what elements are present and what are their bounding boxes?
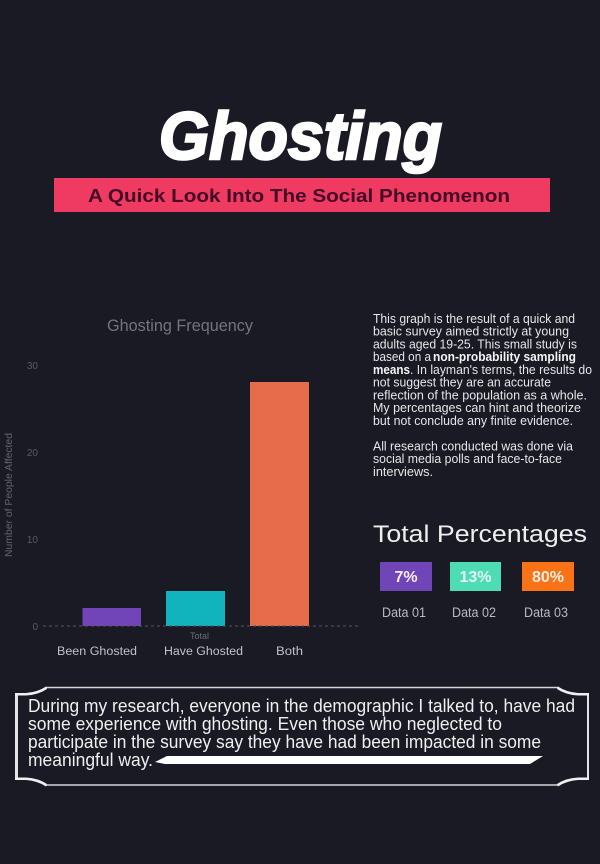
- stat: data 03: [522, 562, 574, 620]
- stat: data 02: [450, 562, 501, 620]
- subtitle banner: [54, 178, 550, 212]
- y axis ticks: 20: [27, 448, 38, 459]
- x axis category labels: Have Ghosted: [164, 646, 243, 658]
- survey description text: means: [373, 362, 410, 377]
- stat: data 01: [380, 562, 432, 620]
- stat: data 01: Data 01: [382, 605, 426, 620]
- bar: have ghosted: [166, 591, 225, 626]
- y axis ticks: [27, 361, 38, 633]
- x axis category labels: Been Ghosted: [57, 646, 137, 658]
- survey description text: [373, 311, 592, 479]
- stat: data 03: Data 03: [524, 605, 568, 620]
- survey description text: This graph is the result of a quick and: [373, 311, 575, 326]
- survey description text: not suggest they are an accurate: [373, 374, 551, 390]
- survey description text: social media polls and face-to-face: [373, 451, 562, 466]
- callout text: some experience with ghosting. Even those who neglected to: [28, 714, 502, 734]
- callout text: During my research, everyone in the demographic I talked to, have had: [28, 696, 575, 716]
- ornate frame: [15, 686, 589, 786]
- survey description text: basic survey aimed strictly at young: [373, 324, 569, 338]
- chart title: Ghosting Frequency: [107, 317, 254, 335]
- x axis category labels: Both: [276, 646, 303, 658]
- survey description text: . In layman's terms, the results do: [410, 362, 592, 377]
- y axis label: Number of People Affected: [4, 433, 15, 557]
- subtitle text: A Quick Look Into The Social Phenomenon: [88, 186, 510, 206]
- callout text: meaningful way.: [28, 750, 153, 770]
- total percentages heading: Total Percentages: [373, 521, 587, 548]
- bar: been ghosted: [82, 608, 141, 626]
- stat: data 03: 80%: [532, 569, 564, 586]
- x axis title: Total: [190, 631, 209, 641]
- survey description text: non-probability sampling: [433, 349, 576, 364]
- y axis ticks: 10: [27, 535, 38, 546]
- survey description text: My percentages can hint and theorize: [373, 400, 581, 415]
- callout text: participate in the survey say they have had been impacted in some: [28, 732, 541, 752]
- title: Ghosting: [159, 99, 442, 174]
- survey description text: based on a: [373, 349, 432, 364]
- stat: data 01: 7%: [394, 569, 418, 586]
- survey description text: reflection of the population as a whole.: [373, 388, 587, 402]
- survey description text: All research conducted was done via: [373, 438, 574, 454]
- bar chart: ghosting frequency: [4, 317, 358, 658]
- x axis category labels: [57, 646, 303, 658]
- white ribbon accent: [155, 756, 543, 764]
- stat: data 02: Data 02: [452, 605, 496, 620]
- survey description text: adults aged 19-25. This small study is: [373, 336, 577, 352]
- stat: data 02: 13%: [459, 569, 492, 586]
- survey description text: interviews.: [373, 464, 433, 479]
- callout panel: research conclusion: [15, 686, 589, 786]
- survey description text: but not conclude any finite evidence.: [373, 413, 573, 428]
- callout text: [28, 696, 575, 770]
- bar: both: [250, 382, 309, 626]
- y axis ticks: 0: [32, 622, 38, 633]
- y axis ticks: 30: [27, 361, 38, 372]
